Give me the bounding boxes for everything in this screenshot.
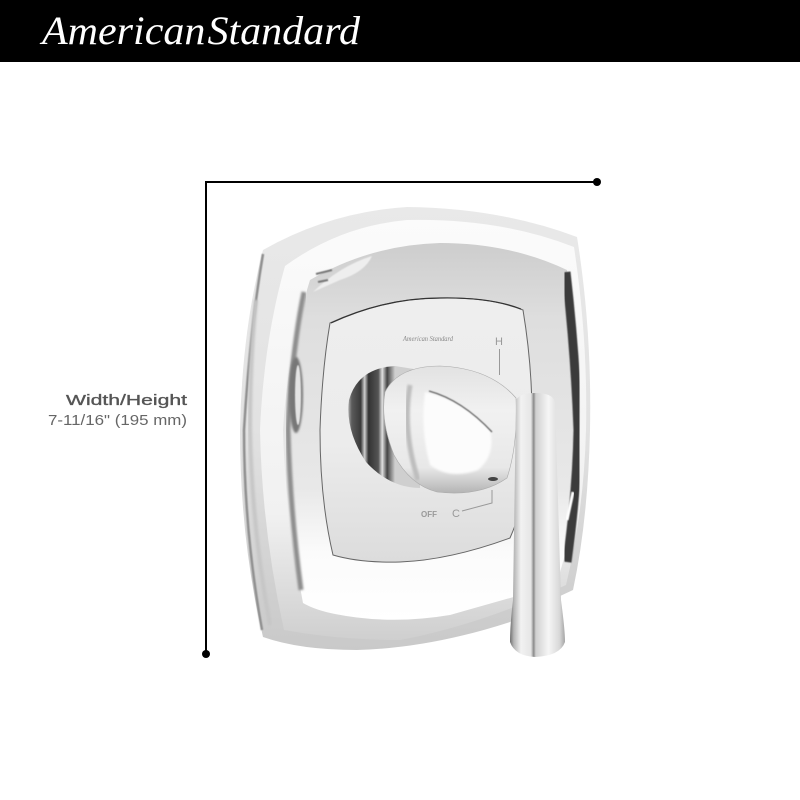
hot mark: H [495, 336, 503, 348]
reflection: left recess [288, 292, 304, 590]
plate brand mark: American Standard [402, 335, 453, 343]
header band [0, 0, 800, 62]
cold and off marks [421, 490, 492, 520]
dimension bracket [202, 178, 601, 658]
reflection: top left highlight [313, 256, 372, 292]
reflection: right dark strip [566, 272, 578, 562]
recessed face [283, 243, 580, 620]
knob body [384, 366, 516, 493]
inner white band [260, 220, 586, 640]
trim plate outer rim [240, 207, 590, 650]
knob rings [348, 366, 420, 488]
dimension label: 7-11/16" (195 mm) [48, 413, 187, 429]
knob front face [423, 392, 492, 474]
cold and off marks: C [452, 508, 460, 520]
lever handle [510, 393, 565, 657]
cold and off marks: OFF [421, 510, 437, 519]
dimension label [48, 392, 188, 429]
hot mark [495, 336, 503, 375]
inner plate [320, 298, 532, 562]
dimension label: Width/Height [66, 392, 188, 409]
logo wordmark: American Standard [39, 8, 361, 53]
product: valve trim [240, 207, 590, 657]
